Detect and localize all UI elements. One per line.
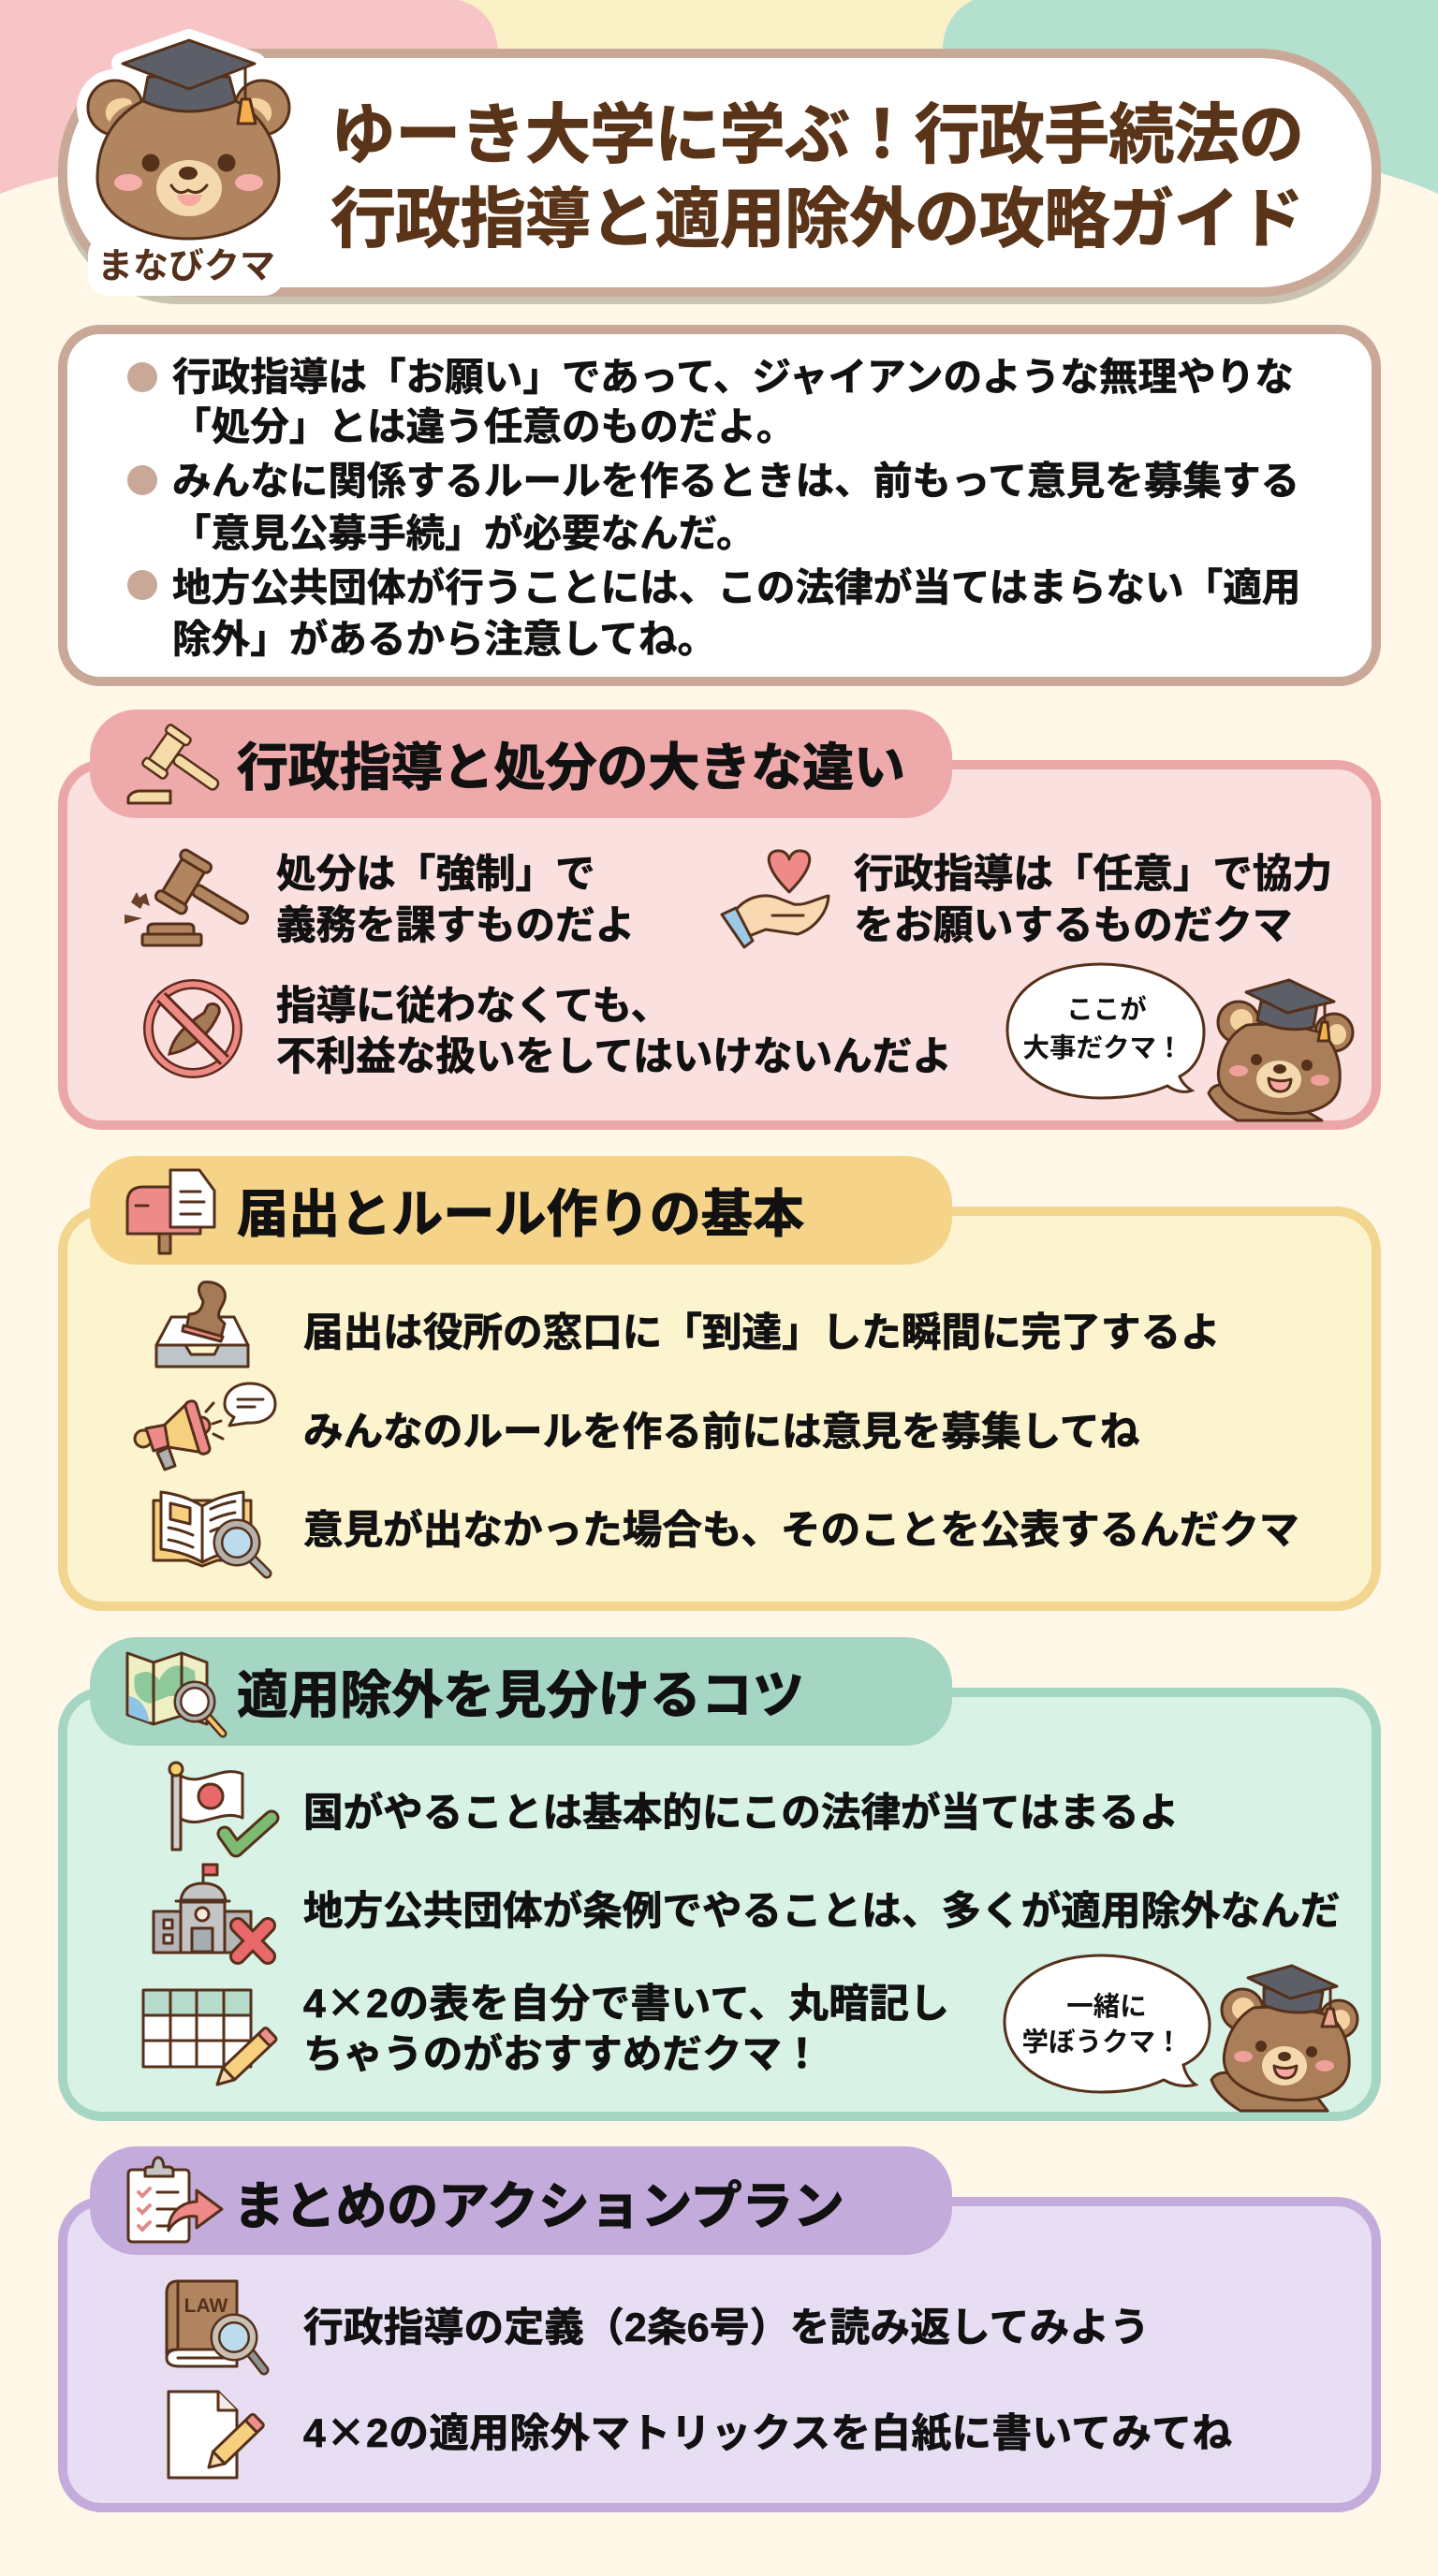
item: guidance [722,851,1332,948]
item: reread [167,2281,1150,2370]
icon: stamp and tray [156,1282,248,1367]
icon: flag and check [169,1763,271,1850]
title text [330,98,1304,256]
heading pill [90,2146,952,2255]
icon: building and cross [154,1865,268,1956]
item: reread: 行政指導の定義（2条6号）を読み返してみよう [303,2305,1150,2350]
bullet 2: 「意見公募手続」が必要なんだ。 [172,511,756,555]
item: table memorization: 4×2の表を自分で書いて、丸暗記し [303,1972,949,2029]
item: national [169,1763,1179,1850]
bullet 2 [127,459,1299,555]
speech bubble: 一緒に [1066,1992,1147,2022]
mascot: manabi bear [88,40,289,286]
heading pill: まとめのアクションプラン [233,2177,844,2235]
item: public comment: みんなのルールを作る前には意見を募集してね [303,1410,1140,1455]
item: table memorization [143,1972,949,2091]
icon: book and magnifier [154,1492,267,1573]
item: table memorization: ちゃうのがおすすめだクマ！ [303,2032,822,2077]
item: no disadvantage: 不利益な扱いをしてはいけないんだよ [276,1034,952,1079]
icon: mailbox and document [127,1170,214,1253]
bullet 1 [127,355,1294,448]
heading pill [90,1156,952,1265]
icon: clipboard and arrow [128,2158,222,2242]
panel: exemption tips [63,1637,1376,2116]
item: arrival [156,1282,1221,1367]
bullet 1: 「処分」とは違う任意のものだよ。 [172,404,796,448]
panel: summary [63,329,1376,681]
item: write matrix: 4×2の適用除外マトリックスを白紙に書いてみてね [303,2402,1232,2459]
icon: light gavel [128,724,231,807]
bear waving [1211,1966,1357,2111]
icon: table and pencil [143,1990,277,2091]
item: publication: 意見が出なかった場合も、そのことを公表するんだクマ [303,1508,1299,1553]
item: disposition: 処分は「強制」で [276,852,595,897]
item: arrival: 届出は役所の窓口に「到達」した瞬間に完了するよ [303,1310,1221,1355]
heading pill: 行政指導と処分の大きな違い [237,739,905,797]
item: national: 国がやることは基本的にこの法律が当てはまるよ [303,1791,1179,1836]
icon: law book [167,2281,264,2370]
bullet 3: 地方公共団体が行うことには、この法律が当てはまらない「適用 [172,565,1300,609]
bullet 3: 除外」があるから注意してね。 [172,617,716,661]
item: no disadvantage: 指導に従わなくても、 [276,984,670,1029]
item: public comment [135,1383,1140,1470]
bullet 1: 行政指導は「お願い」であって、ジャイアンのような無理やりな [172,355,1294,399]
icon: megaphone [135,1383,275,1470]
item: disposition [125,848,635,948]
title text: 行政指導と適用除外の攻略ガイド [330,183,1304,256]
item: no disadvantage [148,984,952,1079]
title banner [58,53,1381,304]
mascot name: まなびクマ [97,247,275,286]
speech bubble [1007,964,1204,1098]
panel: action plan [63,2146,1376,2508]
item: publication [154,1492,1299,1573]
icon: gavel [125,848,262,945]
icon: map and magnifier [127,1653,223,1734]
item: guidance: 行政指導は「任意」で協力 [854,852,1332,897]
item: write matrix [169,2392,1232,2478]
speech bubble: 学ぼうクマ！ [1021,2027,1182,2057]
heading pill [90,1637,952,1746]
bullet 3 [127,565,1300,661]
item: local [154,1865,1340,1956]
icon: paper and pencil [169,2392,264,2478]
bear waving [1209,980,1353,1120]
bullet 2: みんなに関係するルールを作るときは、前もって意見を募集する [172,459,1299,503]
speech bubble [1005,1955,1210,2092]
icon: prohibited [148,985,238,1073]
icon: law book: LAW [184,2295,228,2317]
speech bubble: ここが [1066,994,1147,1025]
heading pill: 届出とルール作りの基本 [237,1185,804,1243]
item: disposition: 義務を課すものだよ [276,903,635,948]
panel: difference [63,710,1376,1125]
heading pill: 適用除外を見分けるコツ [237,1666,804,1724]
icon: heart in hand [722,851,829,947]
heading pill [90,710,952,818]
item: local: 地方公共団体が条例でやることは、多くが適用除外なんだ [303,1889,1340,1934]
title text: ゆーき大学に学ぶ！行政手続法の [330,98,1304,171]
speech bubble: 大事だクマ！ [1022,1033,1183,1063]
panel: notification and rules [63,1156,1376,1606]
item: guidance: をお願いするものだクマ [854,903,1293,948]
